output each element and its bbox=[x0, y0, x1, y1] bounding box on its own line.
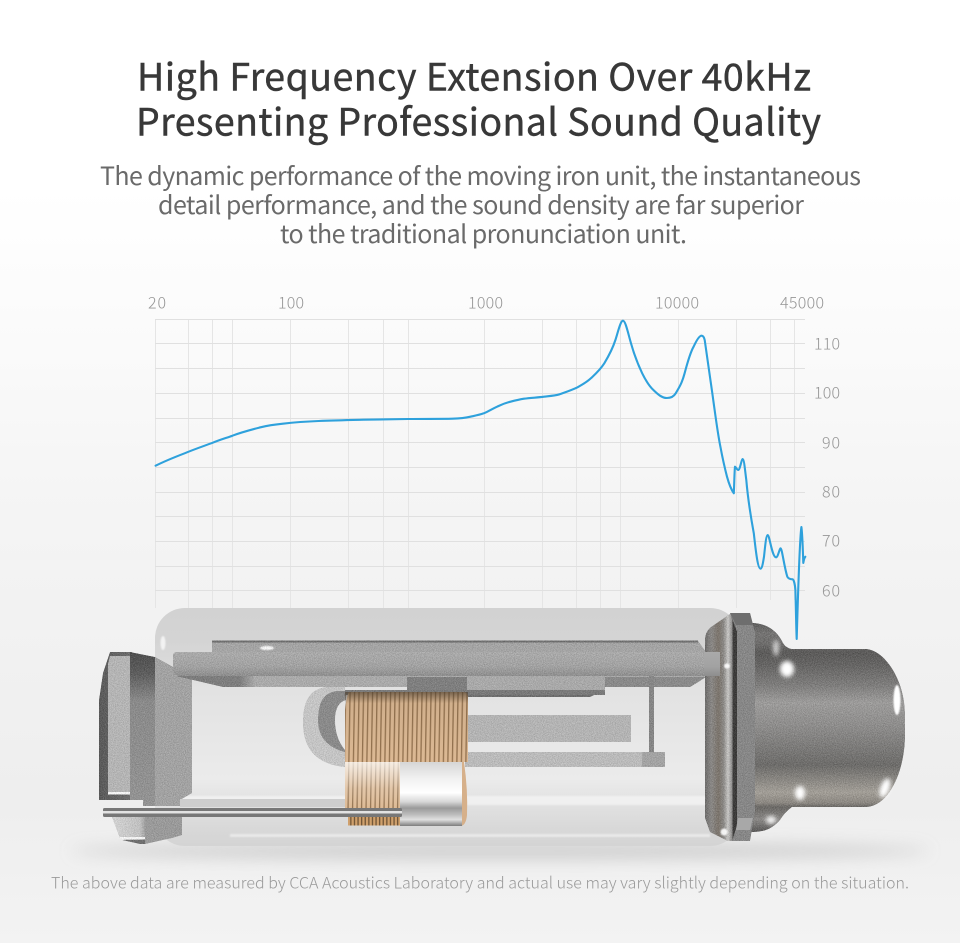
frequency response chart bbox=[148, 290, 840, 608]
under plate dark section bbox=[407, 677, 467, 690]
cap front highlight bbox=[108, 792, 130, 794]
cap outer side bbox=[99, 652, 132, 800]
highlight dome foot bbox=[766, 816, 776, 824]
under plate right shade bbox=[605, 677, 706, 687]
copper lower highlight bbox=[345, 762, 400, 810]
highlight barrel lip top bbox=[894, 685, 900, 715]
x axis labels: 45000 bbox=[780, 290, 824, 314]
tab highlight bbox=[120, 837, 145, 839]
earphone cross-section illustration bbox=[99, 608, 905, 846]
highlight barrel lip bottom bbox=[877, 777, 893, 799]
wire highlight bbox=[103, 811, 402, 814]
glass shell bbox=[155, 608, 740, 846]
y axis labels: 60 bbox=[822, 578, 840, 602]
barrel and dome body bbox=[750, 623, 905, 832]
highlight lower dome bbox=[795, 786, 805, 800]
y axis labels: 80 bbox=[822, 478, 840, 502]
top thin layer edge bbox=[212, 640, 698, 642]
copper right edge bbox=[460, 762, 467, 826]
lower tube reflection bbox=[180, 796, 710, 805]
footnote: The above data are measured by CCA Acoustics Laboratory and actual use may vary slightly depending on the situation. bbox=[51, 870, 909, 894]
y axis labels bbox=[814, 330, 840, 602]
thin layer glint bbox=[260, 646, 274, 650]
subtitle text block: to the traditional pronunciation unit. bbox=[280, 215, 687, 251]
cap front face bbox=[108, 656, 130, 793]
floor shadow bbox=[70, 843, 930, 859]
under plate strip bbox=[176, 676, 706, 690]
wire bbox=[103, 808, 402, 817]
lead wire bbox=[103, 799, 402, 817]
copper winding lower bbox=[345, 762, 400, 810]
flange bottom shine bbox=[736, 818, 753, 830]
main plate bbox=[173, 652, 704, 676]
under plate dark taper bbox=[467, 690, 605, 697]
y axis labels: 100 bbox=[814, 380, 840, 404]
upper plate assembly bbox=[173, 640, 706, 697]
flange top shade bbox=[730, 613, 753, 625]
title bbox=[136, 46, 821, 146]
tab shadow bbox=[122, 840, 145, 844]
y axis labels: 110 bbox=[814, 330, 840, 354]
pin bbox=[649, 676, 654, 752]
x axis labels: 10000 bbox=[655, 290, 699, 314]
copper winding upper bbox=[345, 692, 468, 762]
left end cap bbox=[99, 652, 192, 844]
title: Presenting Professional Sound Quality bbox=[136, 92, 821, 146]
lower cap tab side bbox=[145, 817, 182, 844]
cap collar bbox=[155, 657, 192, 806]
plate tip glint bbox=[724, 664, 730, 668]
y axis labels: 90 bbox=[822, 430, 840, 454]
x axis labels: 100 bbox=[278, 290, 304, 314]
x axis labels bbox=[148, 290, 824, 314]
copper winding shade bbox=[345, 692, 468, 762]
subtitle text block: detail performance, and the sound density are far superior bbox=[158, 186, 804, 222]
bottom reflection bbox=[230, 834, 710, 837]
coil bbox=[345, 692, 468, 826]
armature bend bbox=[303, 687, 345, 767]
armature bbox=[303, 676, 665, 767]
highlight upper dome bbox=[780, 661, 794, 677]
silver sleeve bbox=[400, 762, 462, 826]
highlight dome shoulder bbox=[773, 640, 779, 656]
flange bbox=[730, 613, 755, 841]
right nozzle bbox=[704, 613, 905, 841]
x axis labels: 20 bbox=[148, 290, 166, 314]
y axis labels: 70 bbox=[822, 528, 840, 552]
upper bar bbox=[465, 715, 631, 742]
x axis labels: 1000 bbox=[468, 290, 503, 314]
subtitle text block: The dynamic performance of the moving iron unit, the instantaneous bbox=[100, 157, 861, 193]
connector bbox=[463, 742, 468, 752]
inner ring bbox=[705, 614, 737, 841]
lower cap tab bbox=[112, 817, 145, 844]
top arm shadow bbox=[345, 690, 605, 695]
ring glint bbox=[720, 828, 728, 836]
copper winding bottom bbox=[348, 817, 402, 826]
subtitle text block bbox=[100, 157, 861, 251]
lower bar bbox=[465, 752, 642, 767]
wire backing strip bbox=[180, 799, 345, 807]
frequency response curve bbox=[156, 321, 805, 639]
cap dark side bbox=[130, 652, 155, 806]
plate tip over ring bbox=[704, 652, 720, 676]
chart grid bbox=[155, 320, 805, 608]
armature inner curve bbox=[318, 691, 346, 752]
title: High Frequency Extension Over 40kHz bbox=[137, 46, 811, 102]
shell glint bbox=[160, 636, 166, 650]
bar end block bbox=[642, 752, 665, 767]
top thin layer bbox=[212, 641, 706, 652]
